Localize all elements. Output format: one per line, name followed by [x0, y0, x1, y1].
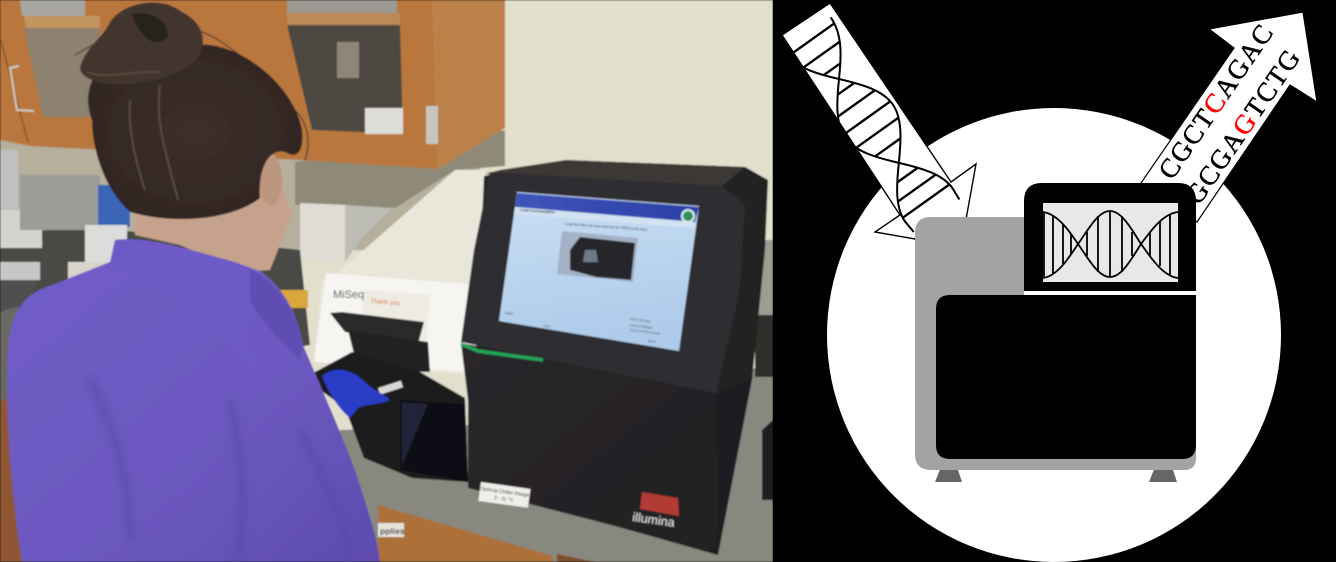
- chiller range label: [478, 482, 531, 508]
- instrument screen: [1043, 203, 1178, 282]
- screen preview image: [557, 231, 638, 282]
- instrument feet: [935, 467, 1177, 482]
- black background: [773, 0, 1336, 562]
- sequencer: touchscreen: Load the flow cell and wash for the RFID to be read: [565, 222, 647, 232]
- person: purple jacket: [7, 239, 380, 562]
- sequencer: white rear housing: MiSeq: [333, 289, 364, 301]
- red sticker: [640, 492, 679, 516]
- sequencer: touchscreen: Clamp Engaged: [630, 323, 653, 330]
- green status strip: [461, 344, 543, 360]
- wall background: [300, 0, 773, 432]
- person: hair: [75, 2, 308, 219]
- arrow: sequence output: [1141, 12, 1317, 222]
- sequencer: touchscreen: Next: [648, 339, 656, 344]
- person: neck and ear: [135, 150, 292, 272]
- illumina logo: illumina: [632, 510, 676, 530]
- sequencer: touchscreen: Flow Cell Door: [630, 317, 652, 324]
- sequencer: touchscreen: Load Consumables: [520, 208, 555, 214]
- sequencer: white rear housing: [314, 170, 486, 375]
- arrow: DNA input: [782, 3, 976, 239]
- icon: DNA helix on screen: [1043, 211, 1178, 278]
- chiller range label: Optimal Chiller Range: [480, 486, 530, 499]
- sequence text: bottom strand: GCGAGTCTG: [1179, 44, 1306, 209]
- supplies label: pplies: [380, 526, 405, 536]
- panel: sequencing schematic: [773, 0, 1336, 562]
- cabinets: [0, 0, 505, 169]
- sequencer: main black body: [461, 160, 768, 555]
- supplies label: [378, 523, 405, 537]
- icon: DNA helix on input arrow: [783, 17, 960, 233]
- chiller range label: 2 - 11 °C: [494, 495, 514, 504]
- sequencer: touchscreen: Flow Cell RFID Read: [630, 328, 660, 336]
- sequencer: touchscreen: Back: [505, 311, 513, 316]
- instrument white divider: [1024, 291, 1196, 295]
- sequence text: top strand: CGCTCAGAC: [1152, 19, 1279, 184]
- instrument screen housing: [1024, 183, 1196, 291]
- sequencer: white rear housing: Thank you: [370, 298, 401, 307]
- white circle: [827, 108, 1281, 562]
- sequencer: touchscreen: Exit: [544, 324, 550, 329]
- icon: sequencer instrument: [915, 183, 1196, 482]
- instrument grey body: [915, 217, 1196, 470]
- sequencer: flow cell tray: [304, 312, 468, 482]
- counter and lower cabinets: [0, 240, 773, 562]
- sequencer: touchscreen: [499, 192, 699, 351]
- instrument black front: [936, 295, 1196, 459]
- person: blue glove: [322, 370, 390, 418]
- panel: laboratory photo: [0, 0, 773, 562]
